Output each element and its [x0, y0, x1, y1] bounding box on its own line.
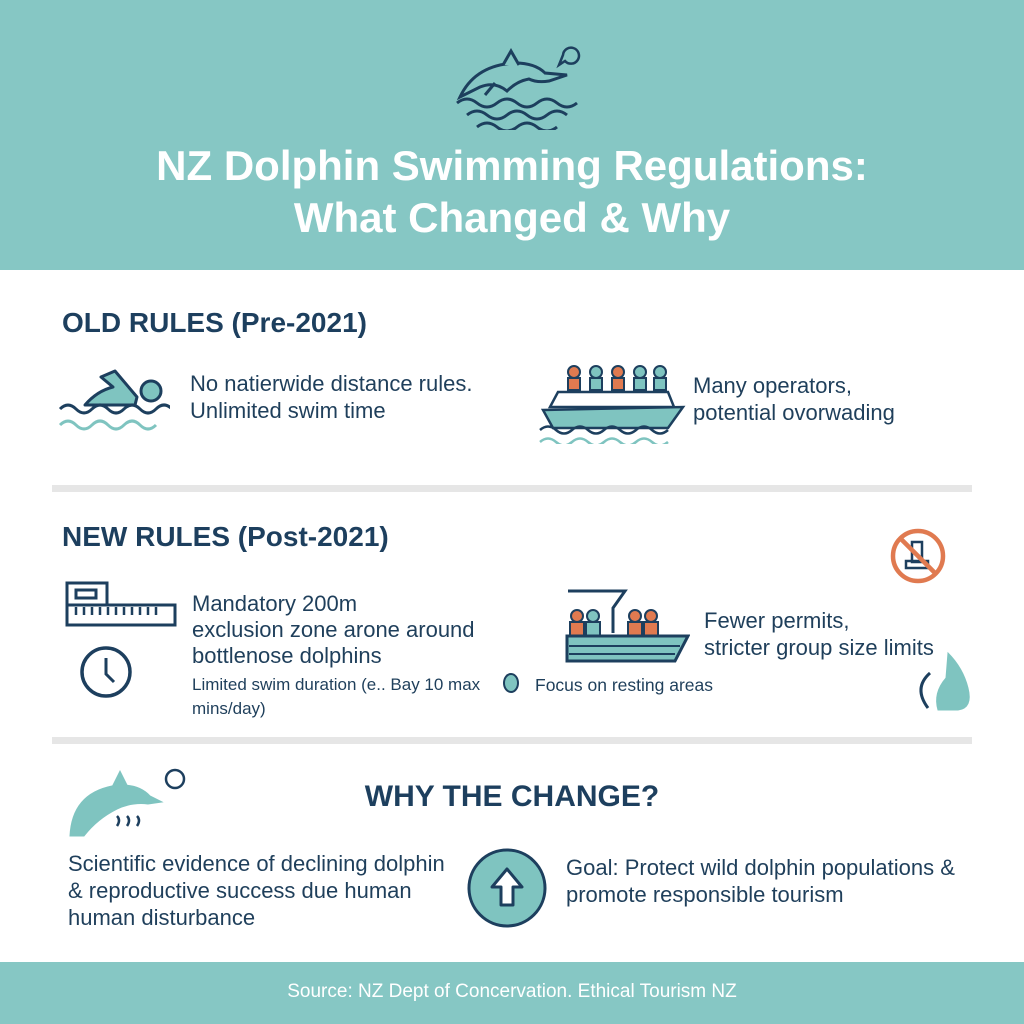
heading: why the change: WHY THE CHANGE? — [365, 780, 659, 813]
footer — [0, 962, 1024, 1024]
header band — [0, 0, 1024, 270]
text: new rule 1 — [192, 591, 475, 668]
text: why 1 — [68, 851, 445, 930]
icon: header dolphin — [456, 46, 580, 130]
text: old rule 1: No natierwide distance rules. — [190, 371, 472, 396]
text: swim duration: Limited swim duration (e.. Bay 10 max mins/day) — [192, 675, 480, 718]
text: new rule 2: Fewer permits, — [704, 608, 849, 633]
title — [156, 142, 868, 241]
text: old rule 2 — [693, 373, 895, 425]
text: why 1: & reproductive success due human — [68, 878, 412, 903]
text: old rule 1: Unlimited swim time — [190, 398, 386, 423]
text: new rule 1: Mandatory 200m — [192, 591, 357, 616]
icon: clock — [80, 646, 132, 698]
text: why 1: human disturbance — [68, 905, 255, 930]
heading: old rules: OLD RULES (Pre-2021) — [62, 307, 367, 338]
icon: ruler — [66, 582, 176, 626]
text: new rule 1: bottlenose dolphins — [192, 643, 382, 668]
icon: small turtle — [503, 673, 519, 693]
text: new rule 1: exclusion zone arone around — [192, 617, 475, 642]
icon: small boat — [566, 590, 690, 662]
text: why 1: Scientific evidence of declining dolphin — [68, 851, 445, 876]
icon: crowded boat — [539, 365, 686, 444]
text: old rule 2: potential ovorwading — [693, 400, 895, 425]
icon: no-sign — [890, 528, 946, 584]
title: NZ Dolphin Swimming Regulations: — [156, 142, 868, 189]
text: goal: Goal: Protect wild dolphin populations & — [566, 855, 955, 880]
footer source text: Source: NZ Dept of Concervation. Ethical Tourism NZ — [287, 981, 737, 1002]
heading: new rules: NEW RULES (Post-2021) — [62, 521, 389, 552]
title: What Changed & Why — [294, 194, 730, 241]
text: goal: promote responsible tourism — [566, 882, 844, 907]
icon: up arrow circle — [468, 848, 546, 928]
text: new rule 2 — [704, 608, 934, 660]
text: old rule 1 — [190, 371, 472, 423]
text: old rule 2: Many operators, — [693, 373, 852, 398]
icon: corner creature — [919, 652, 970, 710]
text: new rule 2: stricter group size limits — [704, 635, 934, 660]
icon: swimmer — [59, 370, 170, 431]
text: goal — [566, 855, 955, 907]
text: resting areas: Focus on resting areas — [535, 675, 713, 695]
icon: dolphin small — [70, 768, 186, 836]
